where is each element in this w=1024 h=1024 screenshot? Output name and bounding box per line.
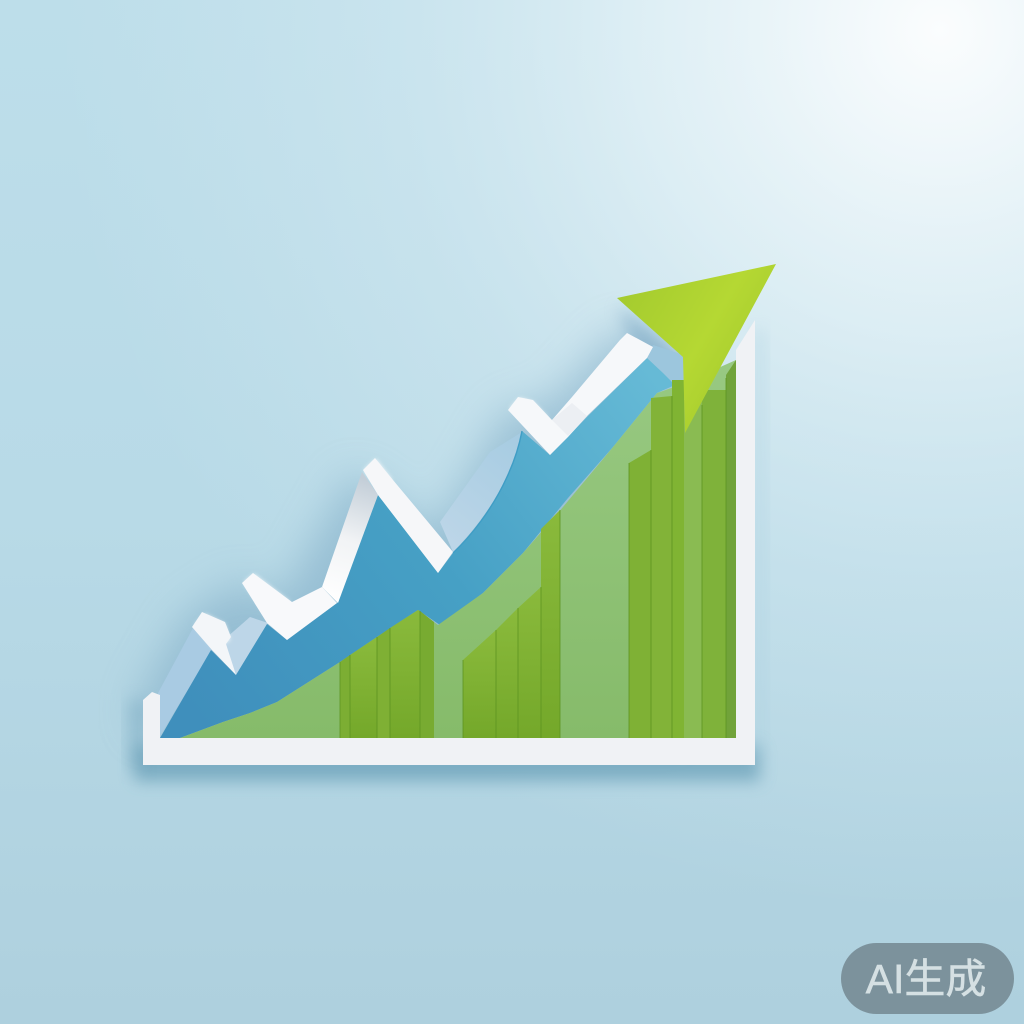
blue fold right	[440, 432, 522, 552]
blue edge line	[453, 431, 522, 553]
blue area	[160, 358, 675, 738]
left bar group	[340, 610, 434, 738]
right bar group	[629, 360, 736, 738]
white ribbon fold 3	[322, 472, 378, 603]
white ribbon 2	[242, 573, 337, 640]
blue fold second	[212, 617, 268, 675]
blue fold left	[158, 628, 212, 736]
white ribbon 4	[363, 458, 453, 573]
badge: AI生成	[841, 943, 1014, 1014]
light green area	[180, 360, 736, 738]
chart	[128, 264, 776, 781]
white ribbon step shade	[552, 403, 587, 436]
white ribbon glow	[195, 398, 548, 648]
white frame	[143, 320, 755, 765]
bars	[340, 360, 736, 738]
middle bar group	[463, 510, 560, 738]
blue shadow panel near arrow	[647, 345, 684, 395]
green arrow head	[617, 264, 776, 433]
badge: AI生成: AI生成	[866, 956, 986, 1002]
drop shadows	[128, 305, 766, 781]
white ribbon 5	[508, 333, 653, 455]
white ribbon 1	[192, 612, 236, 675]
bar separators	[340, 378, 726, 738]
